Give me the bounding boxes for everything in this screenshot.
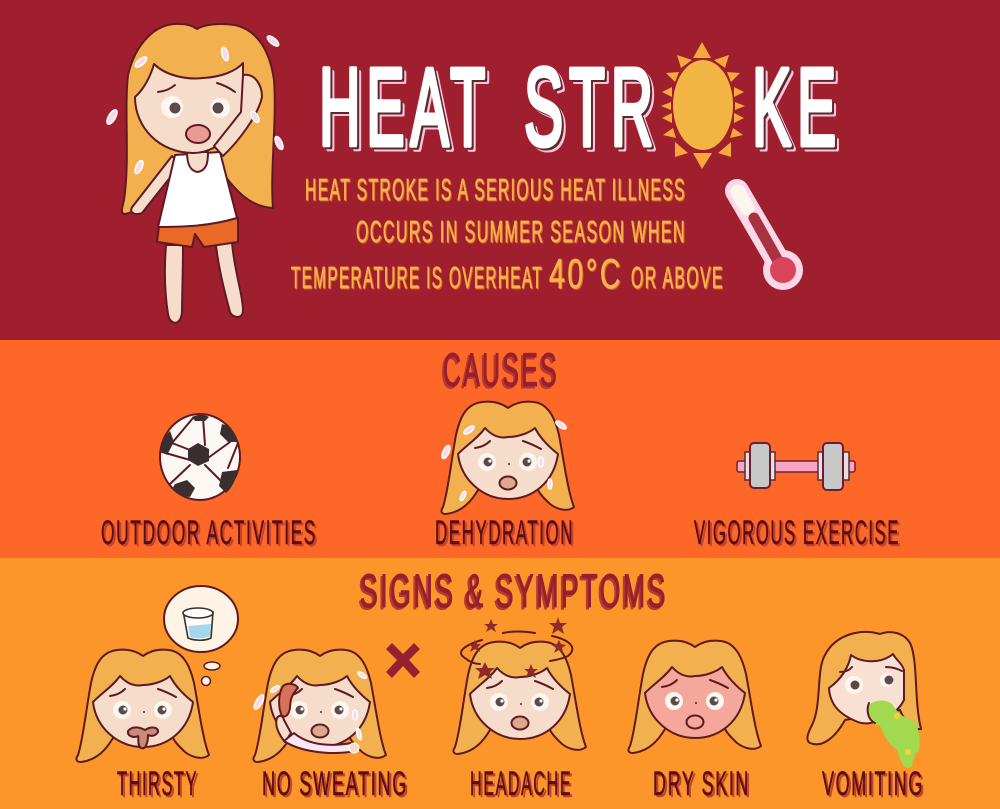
panel: causes: DEHYDRATION [435, 514, 574, 552]
title: HEAT STROKE: HEAT [319, 46, 491, 169]
panel: causes [0, 340, 1000, 558]
text: definition line 2: OCCURS IN SUMMER SEASON WHEN [356, 214, 686, 249]
label: no sweating: NO SWEATING [262, 765, 408, 803]
panel: signs and symptoms: THIRSTY [117, 765, 198, 803]
heading: signs and symptoms: SIGNS & SYMPTOMS [360, 564, 668, 617]
text: definition line 3 [291, 250, 724, 297]
icon: girl thirsty [76, 650, 209, 762]
text: definition line 3: TEMPERATURE IS OVERHEAT [291, 260, 543, 295]
text: definition line 3: 40°C [549, 250, 623, 297]
label: dry skin: DRY SKIN [653, 765, 750, 803]
icon: sun [661, 42, 745, 169]
title: HEAT STROKE: KE [752, 46, 842, 169]
heading: causes: CAUSES [443, 343, 559, 396]
panel: heat stroke header [0, 0, 1000, 340]
icon: girl dehydrated [440, 402, 574, 514]
icon: dumbbell [737, 443, 855, 490]
icon: girl with dry skin [628, 641, 761, 753]
title: HEAT STROKE [319, 46, 842, 169]
illustration: girl sweating [105, 24, 285, 323]
icon: girl with headache [453, 617, 586, 754]
label: outdoor activities: OUTDOOR ACTIVITIES [101, 514, 317, 552]
icon: girl not sweating [252, 650, 386, 762]
icon: thought bubble with glass of water [164, 586, 238, 686]
icon: thermometer [737, 191, 803, 290]
title: HEAT STROKE: STR [524, 46, 659, 169]
text: definition line 3: OR ABOVE [631, 260, 724, 295]
icon: girl vomiting [807, 632, 921, 768]
icon: red cross [386, 643, 420, 678]
panel: signs and symptoms [0, 558, 1000, 809]
icon: soccer ball [160, 414, 240, 500]
panel: signs and symptoms: HEADACHE [470, 765, 572, 803]
